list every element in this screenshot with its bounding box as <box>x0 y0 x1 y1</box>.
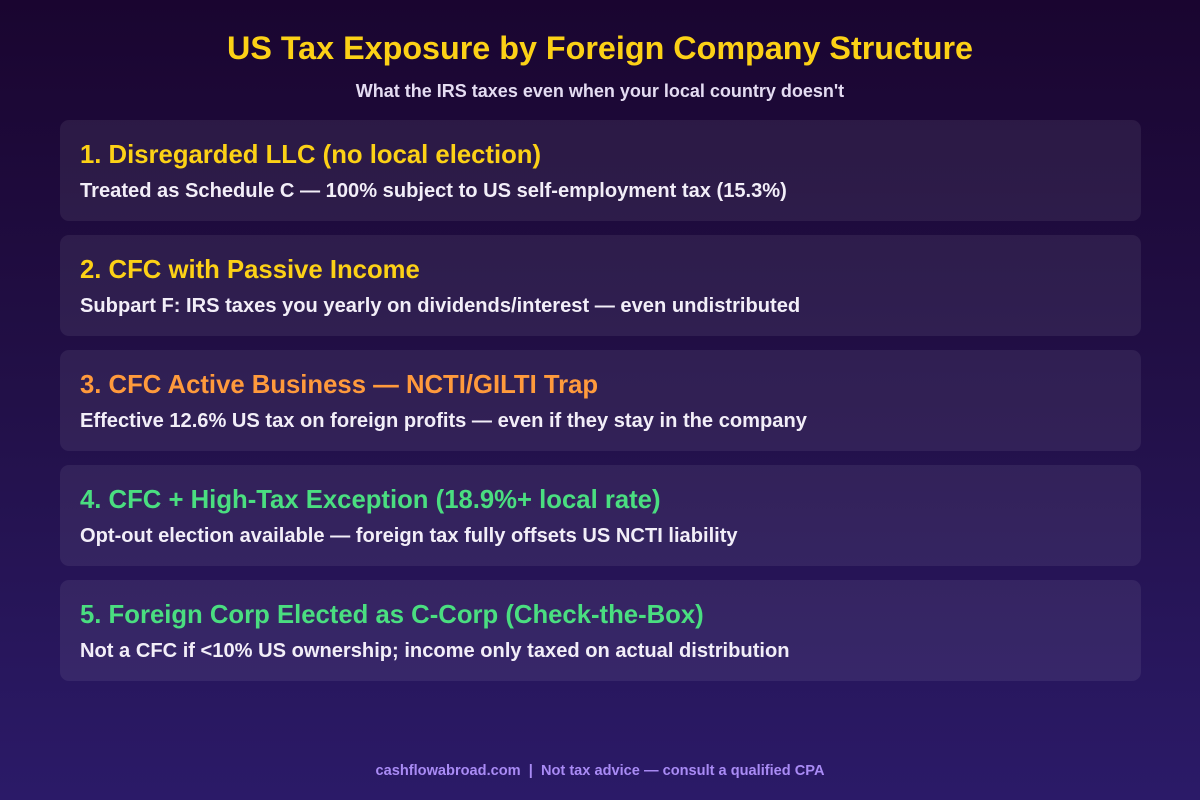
panel: disregarded LLC: 1. Disregarded LLC (no local election) <box>80 141 541 169</box>
panel: CFC active: 3. CFC Active Business — NCTI/GILTI Trap <box>80 371 598 399</box>
panel: CFC passive: Subpart F: IRS taxes you yearly on dividends/interest — even undistributed <box>80 295 800 317</box>
panel: CFC active <box>60 350 1141 451</box>
panel: check-the-box <box>60 580 1141 681</box>
panel: disregarded LLC: Treated as Schedule C — 100% subject to US self-employment tax (15.3%) <box>80 180 787 202</box>
panel: high-tax exception: Opt-out election available — foreign tax fully offsets US NCTI liability <box>80 525 738 547</box>
panel: CFC passive <box>60 235 1141 336</box>
panel: disregarded LLC <box>60 120 1141 221</box>
panel: high-tax exception <box>60 465 1141 566</box>
panel: CFC passive: 2. CFC with Passive Income <box>80 256 420 284</box>
panel: CFC active: Effective 12.6% US tax on foreign profits — even if they stay in the company <box>80 410 807 432</box>
panel: check-the-box: 5. Foreign Corp Elected as C-Corp (Check-the-Box) <box>80 601 704 629</box>
title: US Tax Exposure by Foreign Company Structure <box>227 30 973 66</box>
panel: high-tax exception: 4. CFC + High-Tax Exception (18.9%+ local rate) <box>80 486 661 514</box>
footer: cashflowabroad.com | Not tax advice — consult a qualified CPA <box>375 763 824 779</box>
subtitle: What the IRS taxes even when your local country doesn't <box>356 81 844 101</box>
panel: check-the-box: Not a CFC if <10% US ownership; income only taxed on actual distribution <box>80 640 790 662</box>
